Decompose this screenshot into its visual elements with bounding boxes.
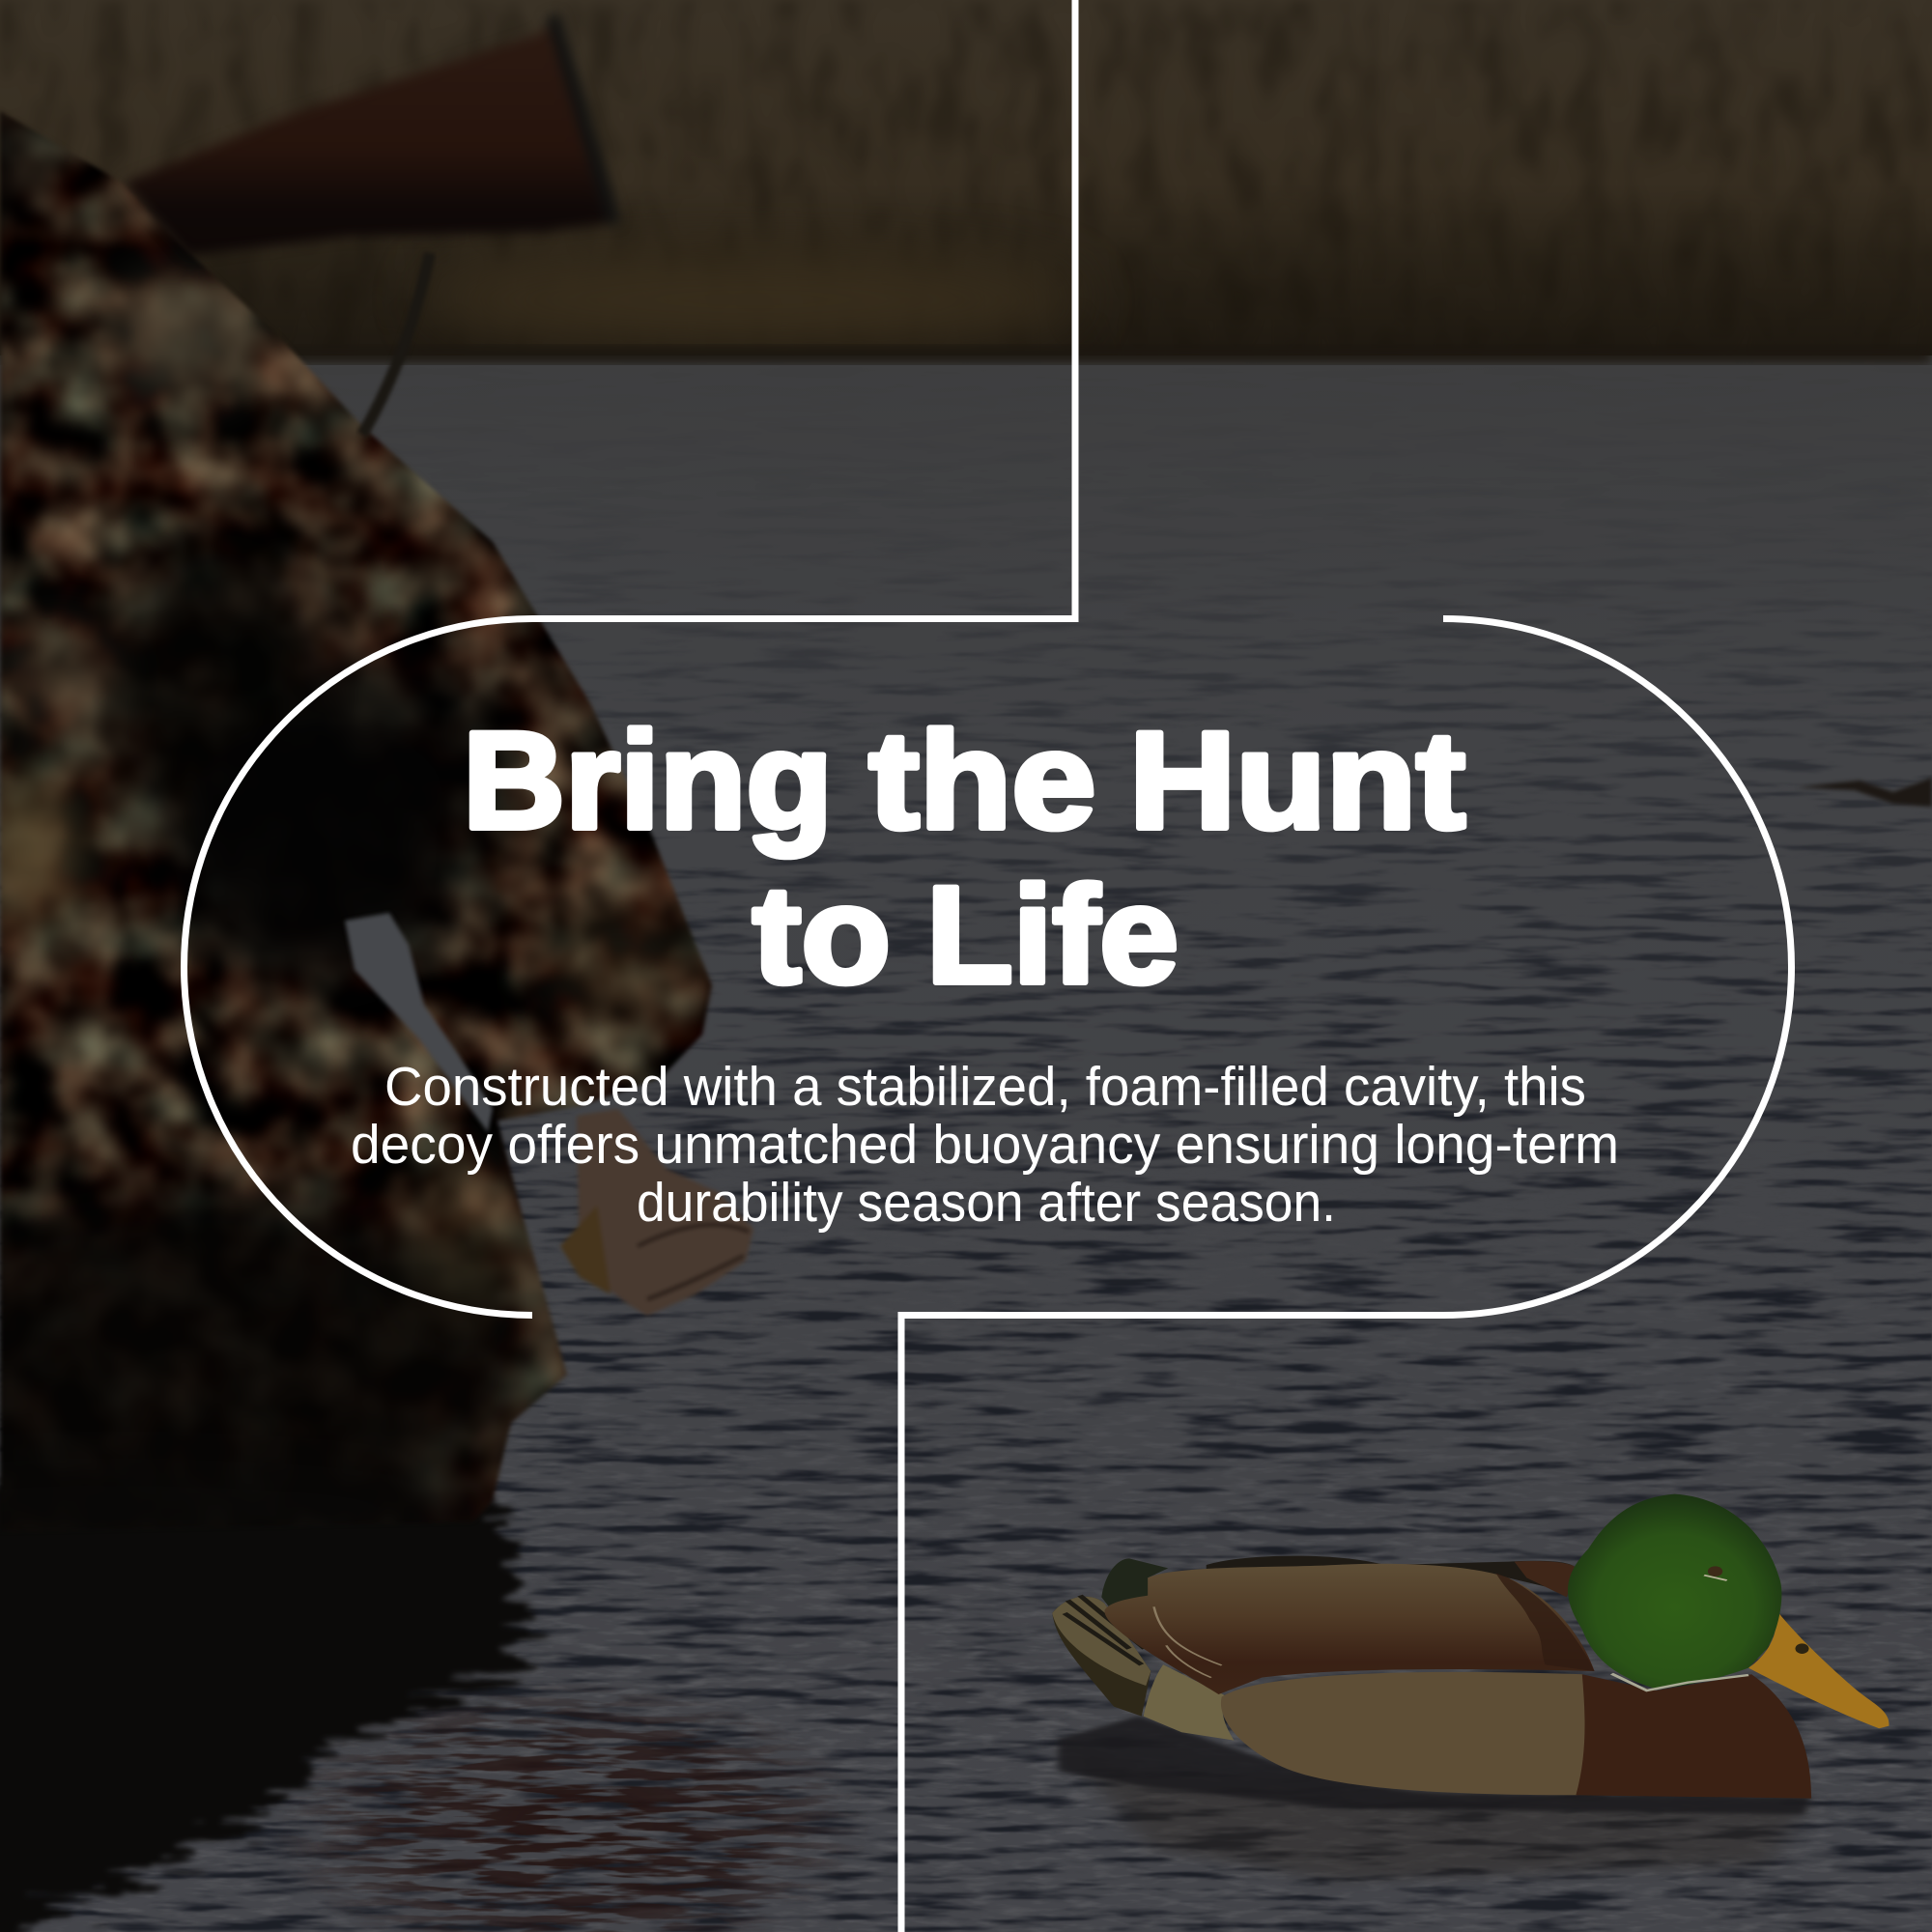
eye	[1704, 1566, 1727, 1580]
grass bank	[0, 0, 1932, 367]
brown ripples near reflection	[297, 1694, 844, 1932]
hand holding decoy anchor	[560, 1109, 753, 1316]
white outline, lower right segment	[901, 618, 1791, 1932]
dark water reflection under hunter	[0, 1488, 536, 1932]
neck ring	[1611, 1674, 1748, 1690]
gun sling	[362, 253, 430, 435]
wing	[1104, 1564, 1595, 1694]
title: to	[753, 859, 891, 1012]
back shadow	[1207, 1556, 1576, 1594]
gap of water between arm and body	[345, 913, 493, 1132]
title: Bring	[463, 704, 833, 858]
bill	[1748, 1610, 1889, 1728]
gun stock	[124, 15, 616, 256]
green head	[1568, 1494, 1781, 1689]
title	[463, 704, 1465, 1012]
description text	[351, 1056, 1619, 1234]
description text: durability season after season.	[637, 1172, 1336, 1234]
reeds at right edge	[1797, 778, 1932, 807]
title: the	[869, 704, 1095, 858]
cream rear	[1144, 1664, 1234, 1741]
duck decoy	[1052, 1494, 1889, 1881]
brown chest	[1576, 1674, 1811, 1799]
curled tail feathers	[1101, 1558, 1168, 1613]
striped tail	[1052, 1597, 1151, 1717]
description text: decoy offers unmatched buoyancy ensuring long-term	[351, 1114, 1619, 1176]
description text: Constructed with a stabilized, foam-filled cavity, this	[384, 1056, 1586, 1118]
hunter in camouflage	[0, 87, 734, 1575]
title: Hunt	[1129, 704, 1465, 858]
waterline shadow	[1059, 1717, 1810, 1814]
cream flank	[1221, 1672, 1585, 1795]
white outline, upper left segment	[184, 0, 1075, 1316]
decoy reflection	[1059, 1739, 1810, 1881]
title: Life	[926, 859, 1179, 1012]
